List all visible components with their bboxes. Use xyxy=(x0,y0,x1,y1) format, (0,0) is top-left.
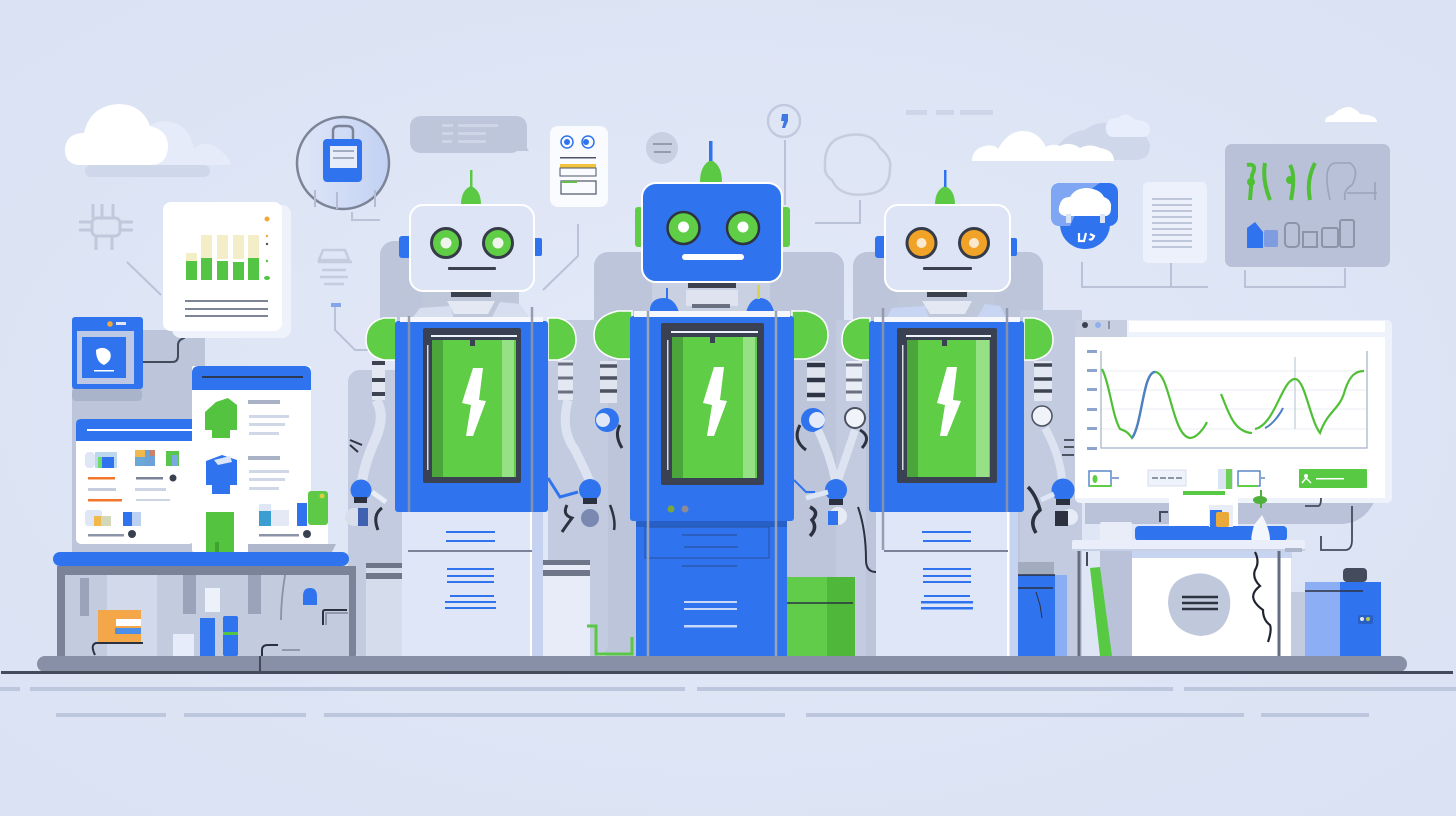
floor dashes xyxy=(0,687,1456,717)
robot arm cluster: left robot xyxy=(345,360,614,532)
speech bubble xyxy=(410,116,529,153)
green bracket xyxy=(587,626,632,654)
arm: right of centre robot xyxy=(797,361,835,480)
body xyxy=(869,317,1024,512)
cabinet xyxy=(636,521,787,656)
blue storage box xyxy=(1018,562,1067,656)
shoulders xyxy=(594,311,632,359)
icon: printer outline xyxy=(318,250,352,307)
cloud badge icon xyxy=(1051,183,1118,249)
neck xyxy=(885,291,1008,321)
background gray panels behind robots xyxy=(72,241,1376,656)
small window icon xyxy=(72,317,143,401)
line chart monitor xyxy=(1075,320,1392,503)
body rails xyxy=(409,307,532,512)
left list card xyxy=(76,419,194,544)
note card xyxy=(550,126,608,207)
blue bin xyxy=(1305,568,1381,656)
cloud: top left xyxy=(65,104,230,177)
neck xyxy=(650,282,775,316)
icon: chip outline xyxy=(79,204,133,250)
icon: blob outline xyxy=(825,135,890,195)
cloud: top right small xyxy=(1325,107,1377,122)
top dashes xyxy=(906,110,993,115)
cable xyxy=(143,332,188,362)
body rails xyxy=(883,308,1007,550)
ground bar xyxy=(37,656,1407,672)
document icon xyxy=(1143,182,1207,263)
body xyxy=(630,311,794,521)
arm: right of right robot with hand xyxy=(1028,361,1078,533)
tall list card xyxy=(192,366,311,552)
body xyxy=(395,317,548,512)
cabinet xyxy=(876,512,1018,656)
icon: padlock in lens xyxy=(297,117,389,209)
robot: right xyxy=(842,170,1053,656)
icon: small blue circle xyxy=(768,105,800,137)
arm: left of centre robot xyxy=(595,361,622,448)
thin front cables xyxy=(259,656,261,672)
desk with items xyxy=(1072,490,1305,672)
right small card xyxy=(248,491,336,552)
shoulders xyxy=(366,318,396,360)
monitor cable xyxy=(1305,498,1352,550)
storage table with items xyxy=(57,566,356,672)
arm: left of right robot with hand xyxy=(794,361,876,572)
side bands behind robots xyxy=(366,560,590,656)
icon: small circle xyxy=(646,132,678,164)
cabinet xyxy=(402,512,543,656)
body rails xyxy=(648,311,776,656)
floor line xyxy=(1,671,1453,674)
blue shelf xyxy=(53,552,349,566)
head xyxy=(875,170,1017,291)
arm: left of left robot xyxy=(345,360,386,530)
head xyxy=(635,141,790,282)
green storage box xyxy=(787,577,855,656)
tools panel xyxy=(1225,144,1390,267)
bar chart card xyxy=(163,202,291,338)
robot: left xyxy=(366,170,576,656)
left ledger lower gray fill xyxy=(57,566,356,656)
connector lines xyxy=(127,140,1345,350)
cloud: top centre right xyxy=(972,114,1150,161)
shoulders xyxy=(842,318,870,360)
arm: right of left robot xyxy=(548,360,614,532)
robot: centre xyxy=(594,141,828,656)
neck xyxy=(410,291,532,321)
head xyxy=(399,170,542,291)
